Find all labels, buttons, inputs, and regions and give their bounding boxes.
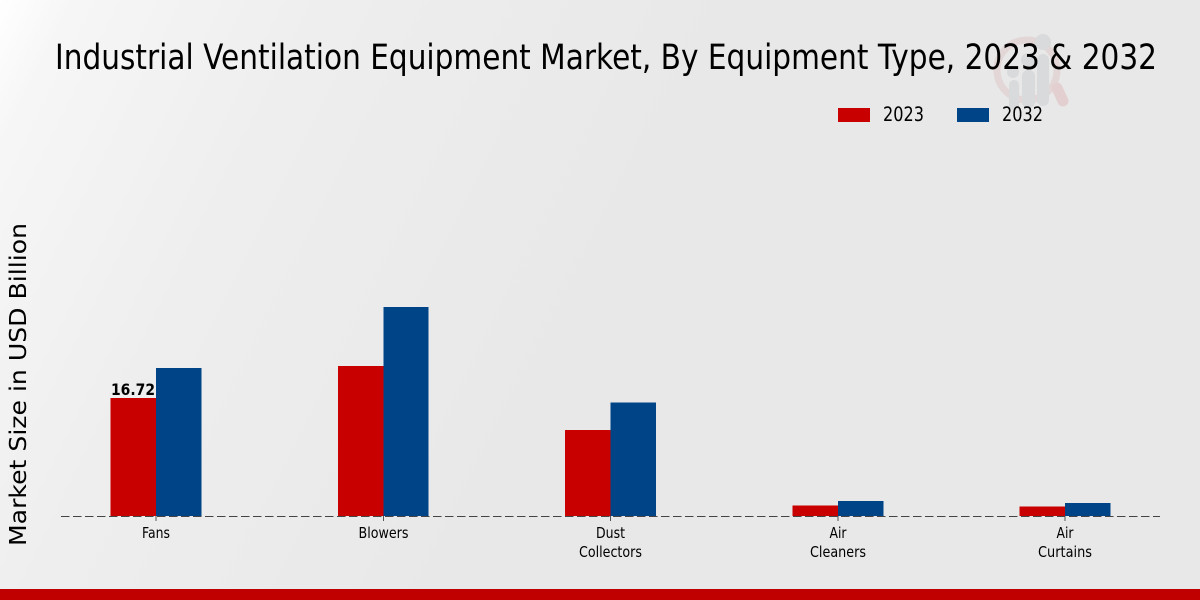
y-axis label: Market Size in USD Billion xyxy=(6,223,32,546)
legend xyxy=(838,103,1043,126)
value label: 16.72: 16.72 xyxy=(111,380,155,399)
category label: Dust Collectors: Collectors xyxy=(579,543,642,561)
legend item: 2023: 2023 xyxy=(883,103,924,126)
bars: Air Cleaners xyxy=(792,501,884,516)
category label: Air Cleaners: Air xyxy=(830,524,847,542)
legend item: 2032 xyxy=(957,103,1043,126)
legend item: 2032: 2032 xyxy=(1002,103,1043,126)
legend item: 2023 xyxy=(838,103,924,126)
category label: Air Curtains xyxy=(1038,524,1092,561)
bars: Air Curtains xyxy=(1020,503,1110,516)
category label: Dust Collectors: Dust xyxy=(596,524,625,542)
category label: Air Curtains: Air xyxy=(1056,524,1074,542)
category label: Air Cleaners: Cleaners xyxy=(810,543,866,561)
bar chart xyxy=(61,307,1160,561)
category label: Dust Collectors xyxy=(579,524,642,561)
watermark logo icon xyxy=(997,34,1063,110)
bars: Fans xyxy=(110,368,202,516)
category label: Air Curtains: Curtains xyxy=(1038,543,1092,561)
category label: Fans: Fans xyxy=(142,524,170,542)
category label: Blowers: Blowers xyxy=(358,524,408,542)
x-axis baseline xyxy=(61,516,1160,521)
bottom red band xyxy=(0,589,1200,600)
bars: Blowers xyxy=(338,307,428,516)
category label: Air Cleaners xyxy=(810,524,866,561)
bars: Dust Collectors xyxy=(565,402,656,516)
